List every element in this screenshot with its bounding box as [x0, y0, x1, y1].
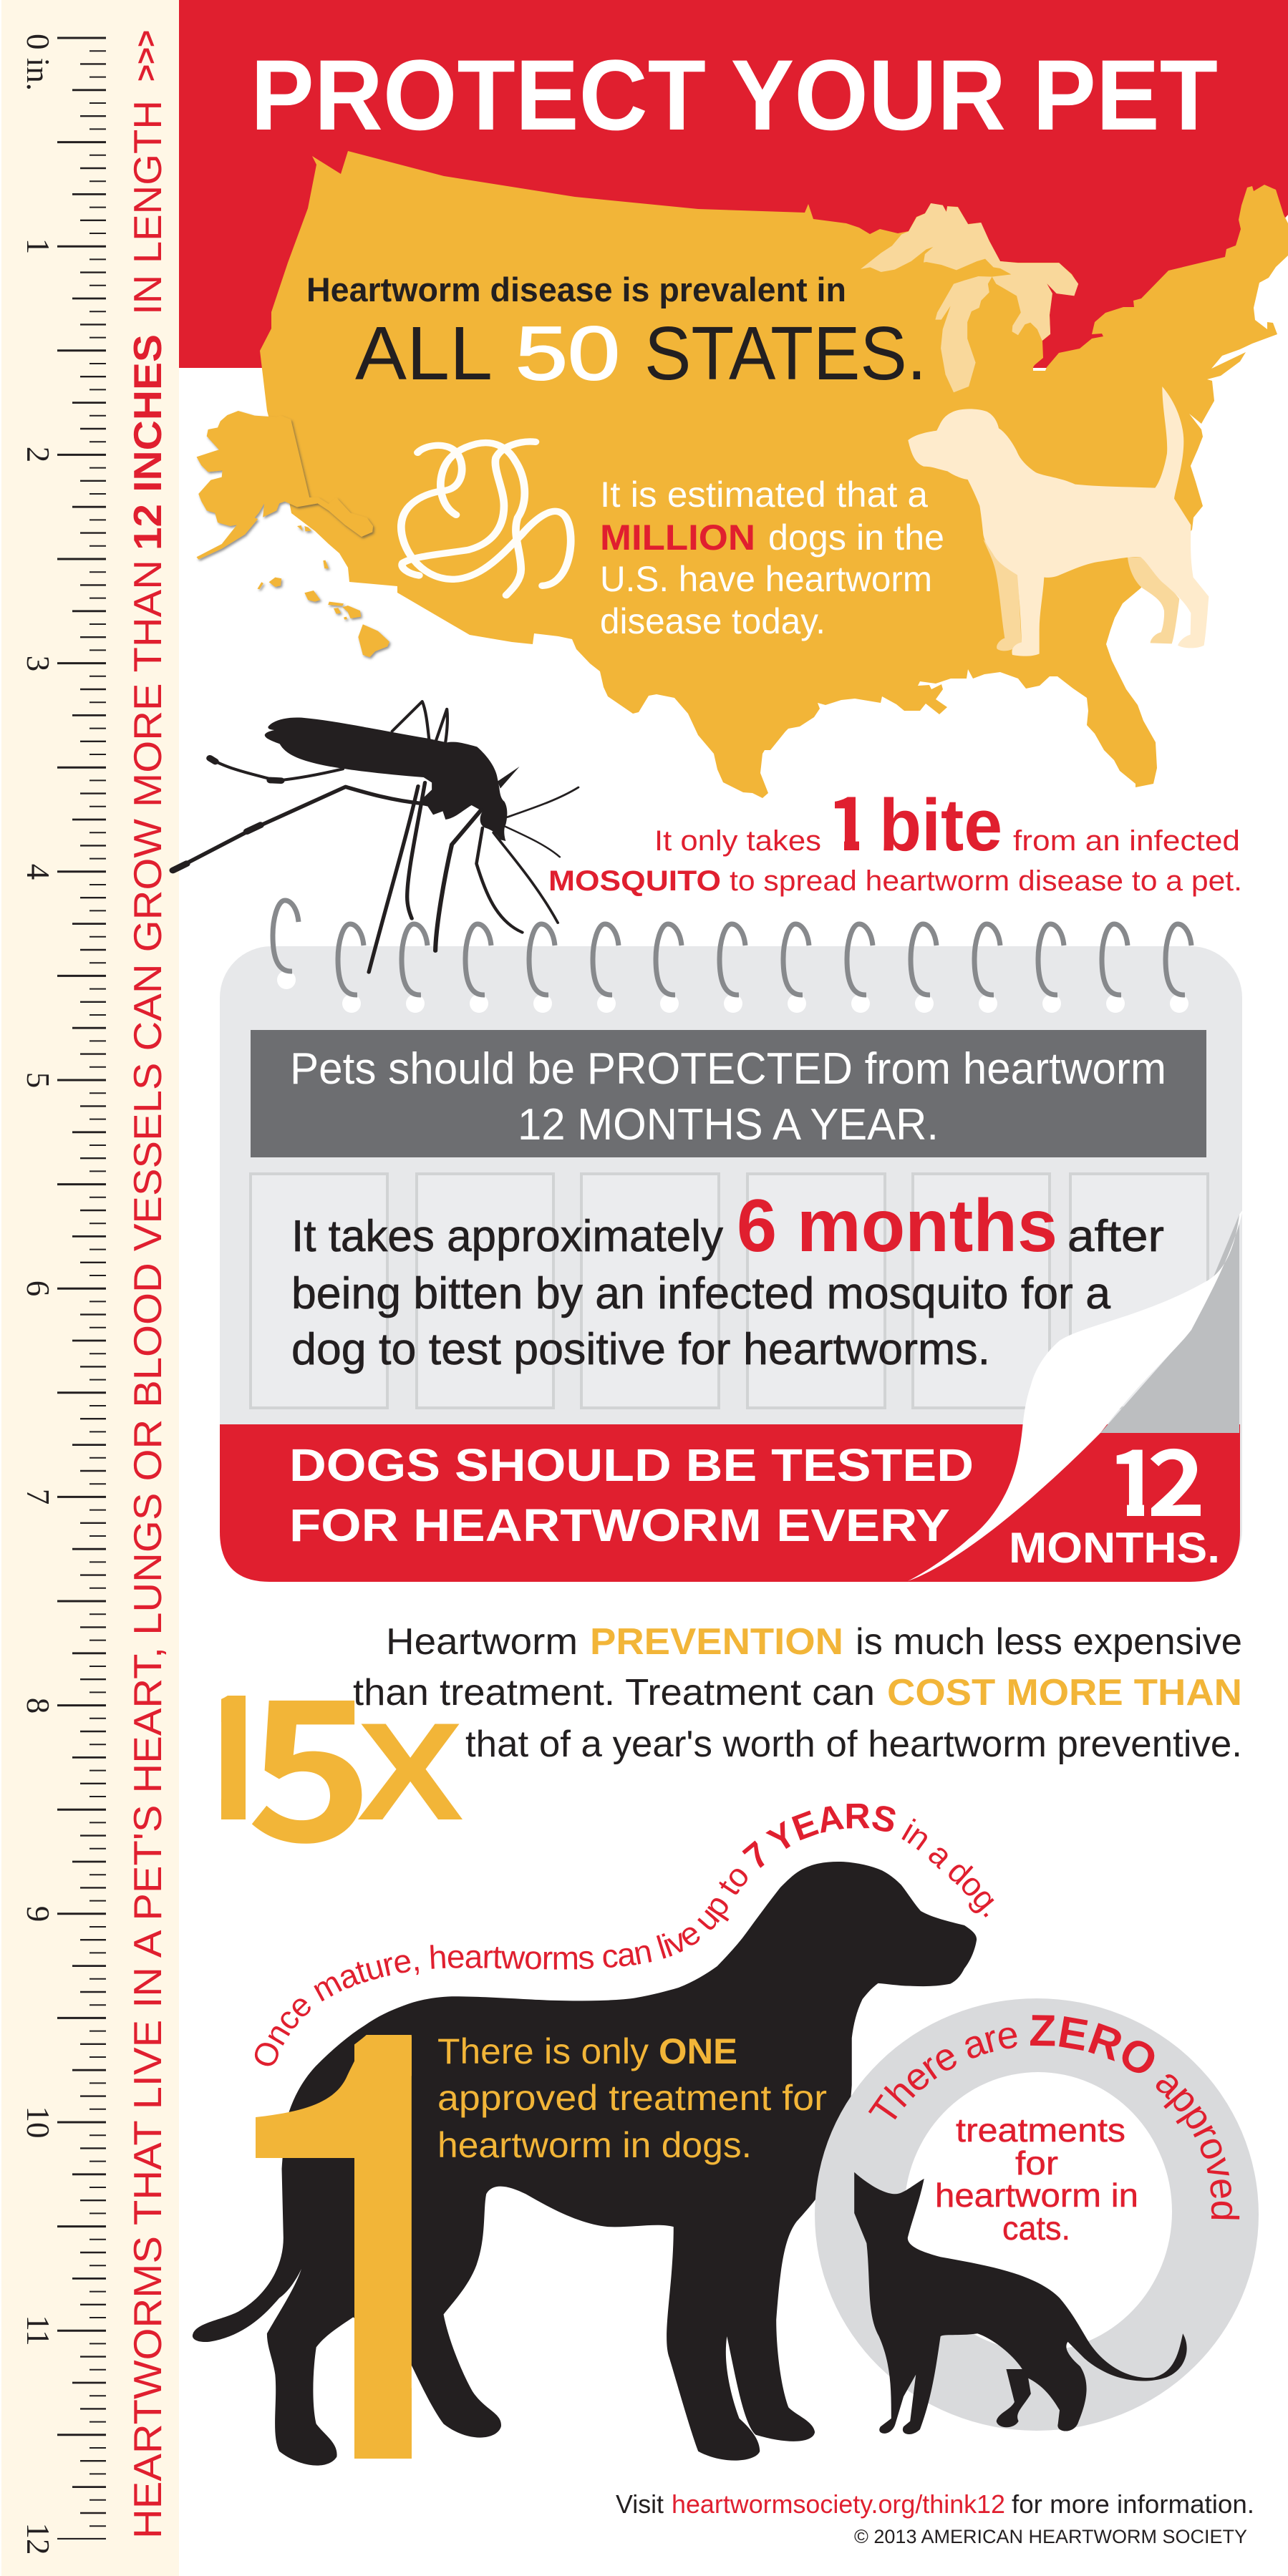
ruler inch numbers: 10 — [20, 2106, 56, 2139]
prevention text: Heartworm — [386, 1621, 578, 1663]
vertical ruler caption: IN LENGTH — [125, 100, 170, 315]
icon: mosquito — [173, 701, 578, 972]
ruler inch numbers: 6 — [20, 1280, 56, 1296]
six months text: after — [1067, 1212, 1164, 1261]
one treatment text: ONE — [659, 2031, 737, 2071]
gray protection banner — [251, 1030, 1206, 1157]
map: Alaska and Hawaii — [197, 411, 389, 657]
cat treatments text: for — [1015, 2144, 1058, 2182]
ruler strip background — [1, 0, 179, 2576]
map headline — [306, 271, 926, 396]
ruler inch numbers: 3 — [20, 656, 56, 671]
million dogs text: disease today. — [600, 601, 825, 641]
six months text — [291, 1185, 1164, 1374]
icon: large black dog — [193, 1862, 977, 2466]
map headline: STATES. — [644, 311, 926, 396]
testing text: FOR HEARTWORM EVERY — [289, 1500, 950, 1551]
icon: black cat — [854, 2172, 1187, 2434]
million dogs text: U.S. have heartworm — [600, 559, 932, 599]
six months text: dog to test positive for heartworms. — [291, 1325, 990, 1374]
one bite text: It only takes — [654, 825, 821, 857]
footer link — [616, 2489, 1254, 2519]
ruler inch numbers: 2 — [20, 447, 56, 462]
six months text: being bitten by an infected mosquito for a — [291, 1269, 1111, 1318]
ruler inch numbers: 9 — [20, 1906, 56, 1922]
big 15X figure — [221, 1696, 463, 1844]
ruler inch numbers: 4 — [20, 864, 56, 880]
cat treatments text: heartworm in — [935, 2177, 1138, 2214]
page curl — [908, 1210, 1243, 1581]
cat treatments text: cats. — [1002, 2210, 1070, 2247]
prevention text — [353, 1621, 1242, 1765]
prevention text: is much less expensive — [856, 1621, 1242, 1663]
map headline: Heartworm disease is prevalent in — [306, 271, 846, 308]
footer link: for more information. — [1012, 2489, 1254, 2519]
ruler inch numbers: 1 — [20, 238, 56, 254]
calendar date cells — [251, 1174, 1208, 1408]
curved zero treatments text — [890, 2046, 1211, 2240]
testing text: 1 — [1107, 1410, 1161, 1542]
big 15X figure: 5 — [246, 1615, 374, 1897]
calendar page — [220, 946, 1242, 1582]
map headline: ALL — [355, 311, 493, 396]
six months text: 6 months — [737, 1185, 1057, 1268]
ruler ticks — [82, 37, 97, 2539]
curved text on ring: There are ZERO approved — [868, 2015, 1240, 2220]
red testing band — [220, 1424, 1240, 1582]
one bite text: to spread heartworm disease to a pet. — [730, 865, 1242, 897]
icon: light dog silhouette on map — [908, 387, 1209, 656]
gray protection banner: Pets should be PROTECTED from heartworm — [290, 1044, 1166, 1094]
one treatment text: There is only — [437, 2031, 649, 2071]
one bite text — [550, 797, 1240, 896]
testing text: DOGS SHOULD BE TESTED — [289, 1439, 974, 1491]
vertical ruler caption: 12 INCHES — [125, 334, 170, 550]
ruler inch numbers — [20, 34, 56, 2555]
prevention text: than treatment. Treatment can — [353, 1672, 875, 1714]
million dogs text: It is estimated that a — [600, 475, 928, 515]
one bite text: MOSQUITO — [548, 865, 721, 897]
ruler inch numbers: 5 — [20, 1072, 56, 1088]
one bite text: 1 — [827, 765, 871, 872]
testing text: 2 — [1147, 1410, 1206, 1542]
testing text — [292, 1449, 1217, 1563]
one treatment text: approved treatment for — [437, 2078, 827, 2118]
prevention text: COST MORE THAN — [887, 1672, 1242, 1714]
cat treatments text — [935, 2111, 1138, 2247]
map: United States — [260, 151, 1288, 798]
great lakes — [861, 203, 1078, 392]
map headline: 50 — [515, 311, 620, 396]
red header block — [179, 0, 1288, 368]
copyright: © 2013 AMERICAN HEARTWORM SOCIETY — [854, 2526, 1247, 2547]
panel: calendar — [220, 900, 1243, 1582]
ruler inch numbers: 7 — [20, 1489, 56, 1505]
ruler inch numbers: 11 — [20, 2315, 56, 2346]
curved lifespan text — [273, 1828, 992, 2071]
one bite text: from an infected — [1013, 825, 1240, 857]
prevention text: that of a year's worth of heartworm preventive. — [465, 1724, 1242, 1765]
big 15X figure: X — [357, 1694, 464, 1850]
prevention text: PREVENTION — [590, 1621, 843, 1663]
ruler inch numbers: 12 — [20, 2522, 56, 2555]
ruler inch numbers: 0 in. — [20, 34, 56, 91]
million dogs text: MILLION — [600, 517, 755, 558]
binder rings — [273, 900, 1191, 1013]
one treatment text: heartworm in dogs. — [437, 2125, 752, 2165]
gray ring behind cat — [815, 1998, 1259, 2431]
one bite text: bite — [879, 784, 1002, 866]
vertical ruler caption: HEARTWORMS THAT LIVE IN A PET'S HEART, LUNGS OR BLOOD VESSELS CAN GROW MORE THAN — [125, 560, 170, 2539]
ruler inch numbers: 8 — [20, 1698, 56, 1714]
vertical ruler caption: >>> — [129, 30, 163, 82]
million dogs text — [600, 475, 944, 641]
cat treatments text: treatments — [956, 2111, 1125, 2149]
icon: heartworm — [401, 442, 571, 596]
title: PROTECT YOUR PET — [251, 39, 1218, 151]
one treatment text — [437, 2031, 827, 2165]
gray protection banner: 12 MONTHS A YEAR. — [518, 1100, 939, 1150]
footer link: Visit — [616, 2489, 664, 2519]
six months text: It takes approximately — [291, 1212, 723, 1261]
big 15X figure: 1 — [180, 1621, 281, 1870]
footer link: heartwormsociety.org/think12 — [672, 2489, 1005, 2519]
testing text: MONTHS. — [1009, 1524, 1220, 1572]
million dogs text: dogs in the — [768, 517, 944, 558]
curved text along dog: Once mature, heartworms can live up to 7 YEARS in a dog. — [255, 1804, 994, 2066]
